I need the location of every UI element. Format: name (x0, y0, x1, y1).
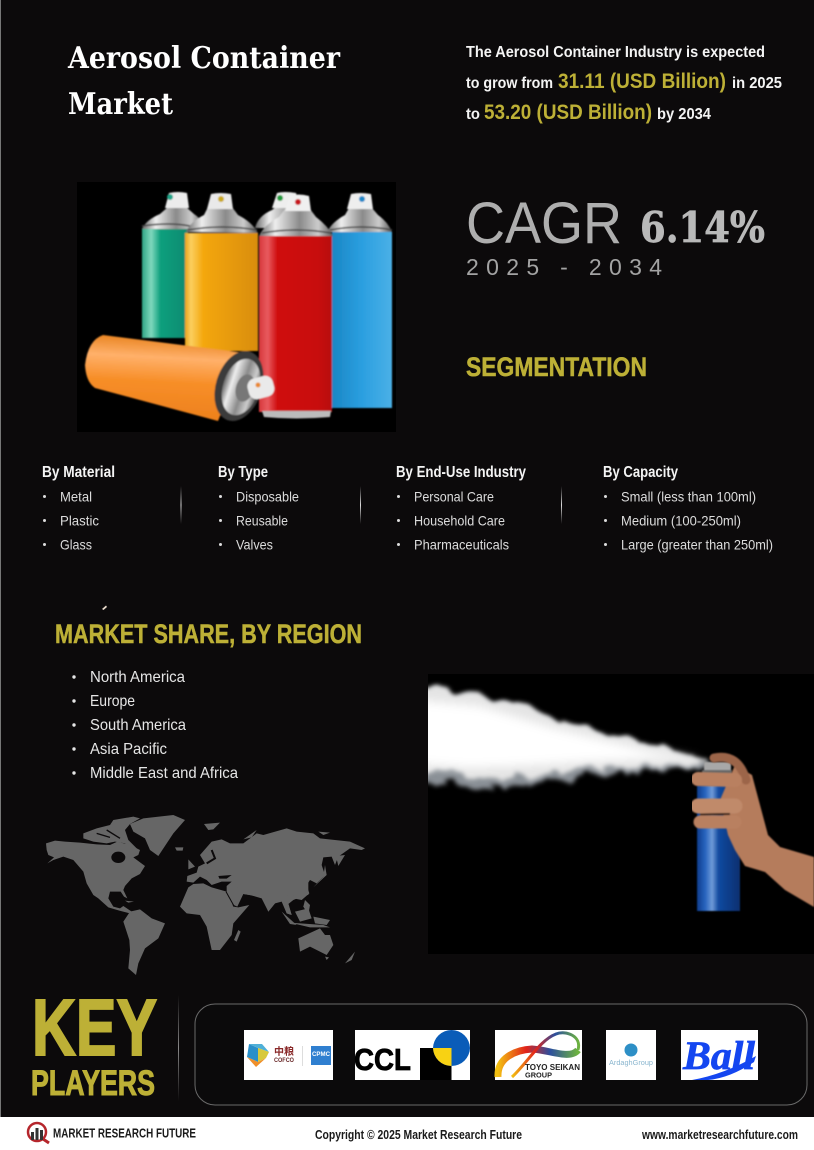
spray can (697, 762, 740, 911)
market forecast text: The Aerosol Container Industry is expected (466, 44, 765, 61)
segment: by type: By Type (218, 464, 268, 481)
CAGR: CAGR (466, 191, 622, 256)
hand (698, 757, 814, 907)
segment: by material: By Material (42, 464, 115, 481)
market forecast text: 31.11 (USD Billion) (558, 70, 726, 93)
segment: by type (218, 464, 299, 552)
segment: by type: Disposable (236, 488, 299, 504)
region list: Middle East and Africa (90, 765, 238, 782)
footer: Copyright © 2025 Market Research Future (315, 1128, 522, 1142)
region list: Asia Pacific (90, 741, 167, 758)
market forecast text: to grow from (466, 75, 553, 92)
logo: toyo seikan (495, 1030, 582, 1080)
logo: cofco (244, 1030, 333, 1080)
can: back green cap (255, 192, 320, 228)
image: hand spraying aerosol (428, 674, 814, 954)
logo: cofco: 中粮 (274, 1045, 294, 1058)
market forecast text: to (466, 106, 480, 123)
logo: ball: Ball (682, 1033, 756, 1078)
logo: ardagh (606, 1030, 656, 1080)
can: green (142, 192, 204, 338)
key players heading (31, 983, 157, 1103)
spray cloud (415, 686, 708, 792)
segment: by capacity (603, 464, 773, 552)
can: yellow (185, 193, 258, 351)
footer logo icon (28, 1123, 49, 1143)
market forecast text: 53.20 (USD Billion) (484, 101, 652, 124)
region list (72, 669, 238, 782)
key players heading: KEY (32, 983, 157, 1072)
key players heading: PLAYERS (31, 1064, 155, 1103)
footer: MARKET RESEARCH FUTURE (53, 1126, 196, 1140)
eurasia (187, 828, 365, 915)
market forecast text: by 2034 (657, 106, 711, 123)
footer (0, 1117, 814, 1150)
logo: ccl (354, 1030, 470, 1080)
australia (298, 928, 333, 955)
segment: by capacity: Large (greater than 250ml) (621, 536, 773, 552)
image: aerosol spray cans (77, 182, 396, 432)
CAGR: 6.14% (640, 203, 765, 252)
segment: by end-use industry (396, 464, 526, 552)
segment: by capacity: Medium (100-250ml) (621, 512, 741, 528)
key players panel (195, 1004, 807, 1105)
africa (180, 883, 249, 950)
logo: cofco: COFCO (274, 1058, 294, 1064)
segment: by material (42, 464, 115, 552)
segment: by end-use industry: Personal Care (414, 488, 494, 504)
title (67, 41, 341, 122)
can: red (259, 194, 333, 418)
north america (46, 841, 145, 913)
title: Market (68, 87, 173, 122)
segment: by material: Metal (60, 488, 92, 504)
greenland (130, 815, 185, 856)
logo: toyo seikan: TOYO SEIKAN (525, 1063, 580, 1072)
market share heading: MARKET SHARE, BY REGION (55, 619, 362, 649)
segment: by material: Glass (60, 536, 92, 552)
logo: ardagh: ArdaghGroup (609, 1060, 653, 1067)
region list: South America (90, 717, 186, 734)
segment: by end-use industry: Pharmaceuticals (414, 536, 509, 552)
CAGR: 2025 - 2034 (466, 254, 662, 280)
segmentation heading: SEGMENTATION (466, 352, 647, 382)
logo: cofco: CPMC (312, 1051, 330, 1058)
segment: by capacity: Small (less than 100ml) (621, 488, 756, 504)
market forecast text: in 2025 (732, 75, 782, 92)
logo: ccl: CCL (354, 1042, 411, 1077)
segment: by material: Plastic (60, 512, 99, 528)
segment: by type: Reusable (236, 512, 288, 528)
segment: by type: Valves (236, 536, 273, 552)
world map (46, 815, 365, 975)
title: Aerosol Container (67, 41, 341, 76)
south america (123, 909, 165, 975)
can: blue (327, 193, 392, 408)
segment: by end-use industry: By End-Use Industry (396, 464, 526, 481)
can: orange lying (85, 335, 276, 427)
segment: by capacity: By Capacity (603, 464, 678, 481)
market forecast text (466, 44, 782, 124)
segment: by end-use industry: Household Care (414, 512, 505, 528)
region list: Europe (90, 693, 135, 710)
region list: North America (90, 669, 185, 686)
southeast asia islands (282, 912, 297, 925)
CAGR (466, 191, 765, 280)
logo: toyo seikan: GROUP (525, 1070, 552, 1080)
